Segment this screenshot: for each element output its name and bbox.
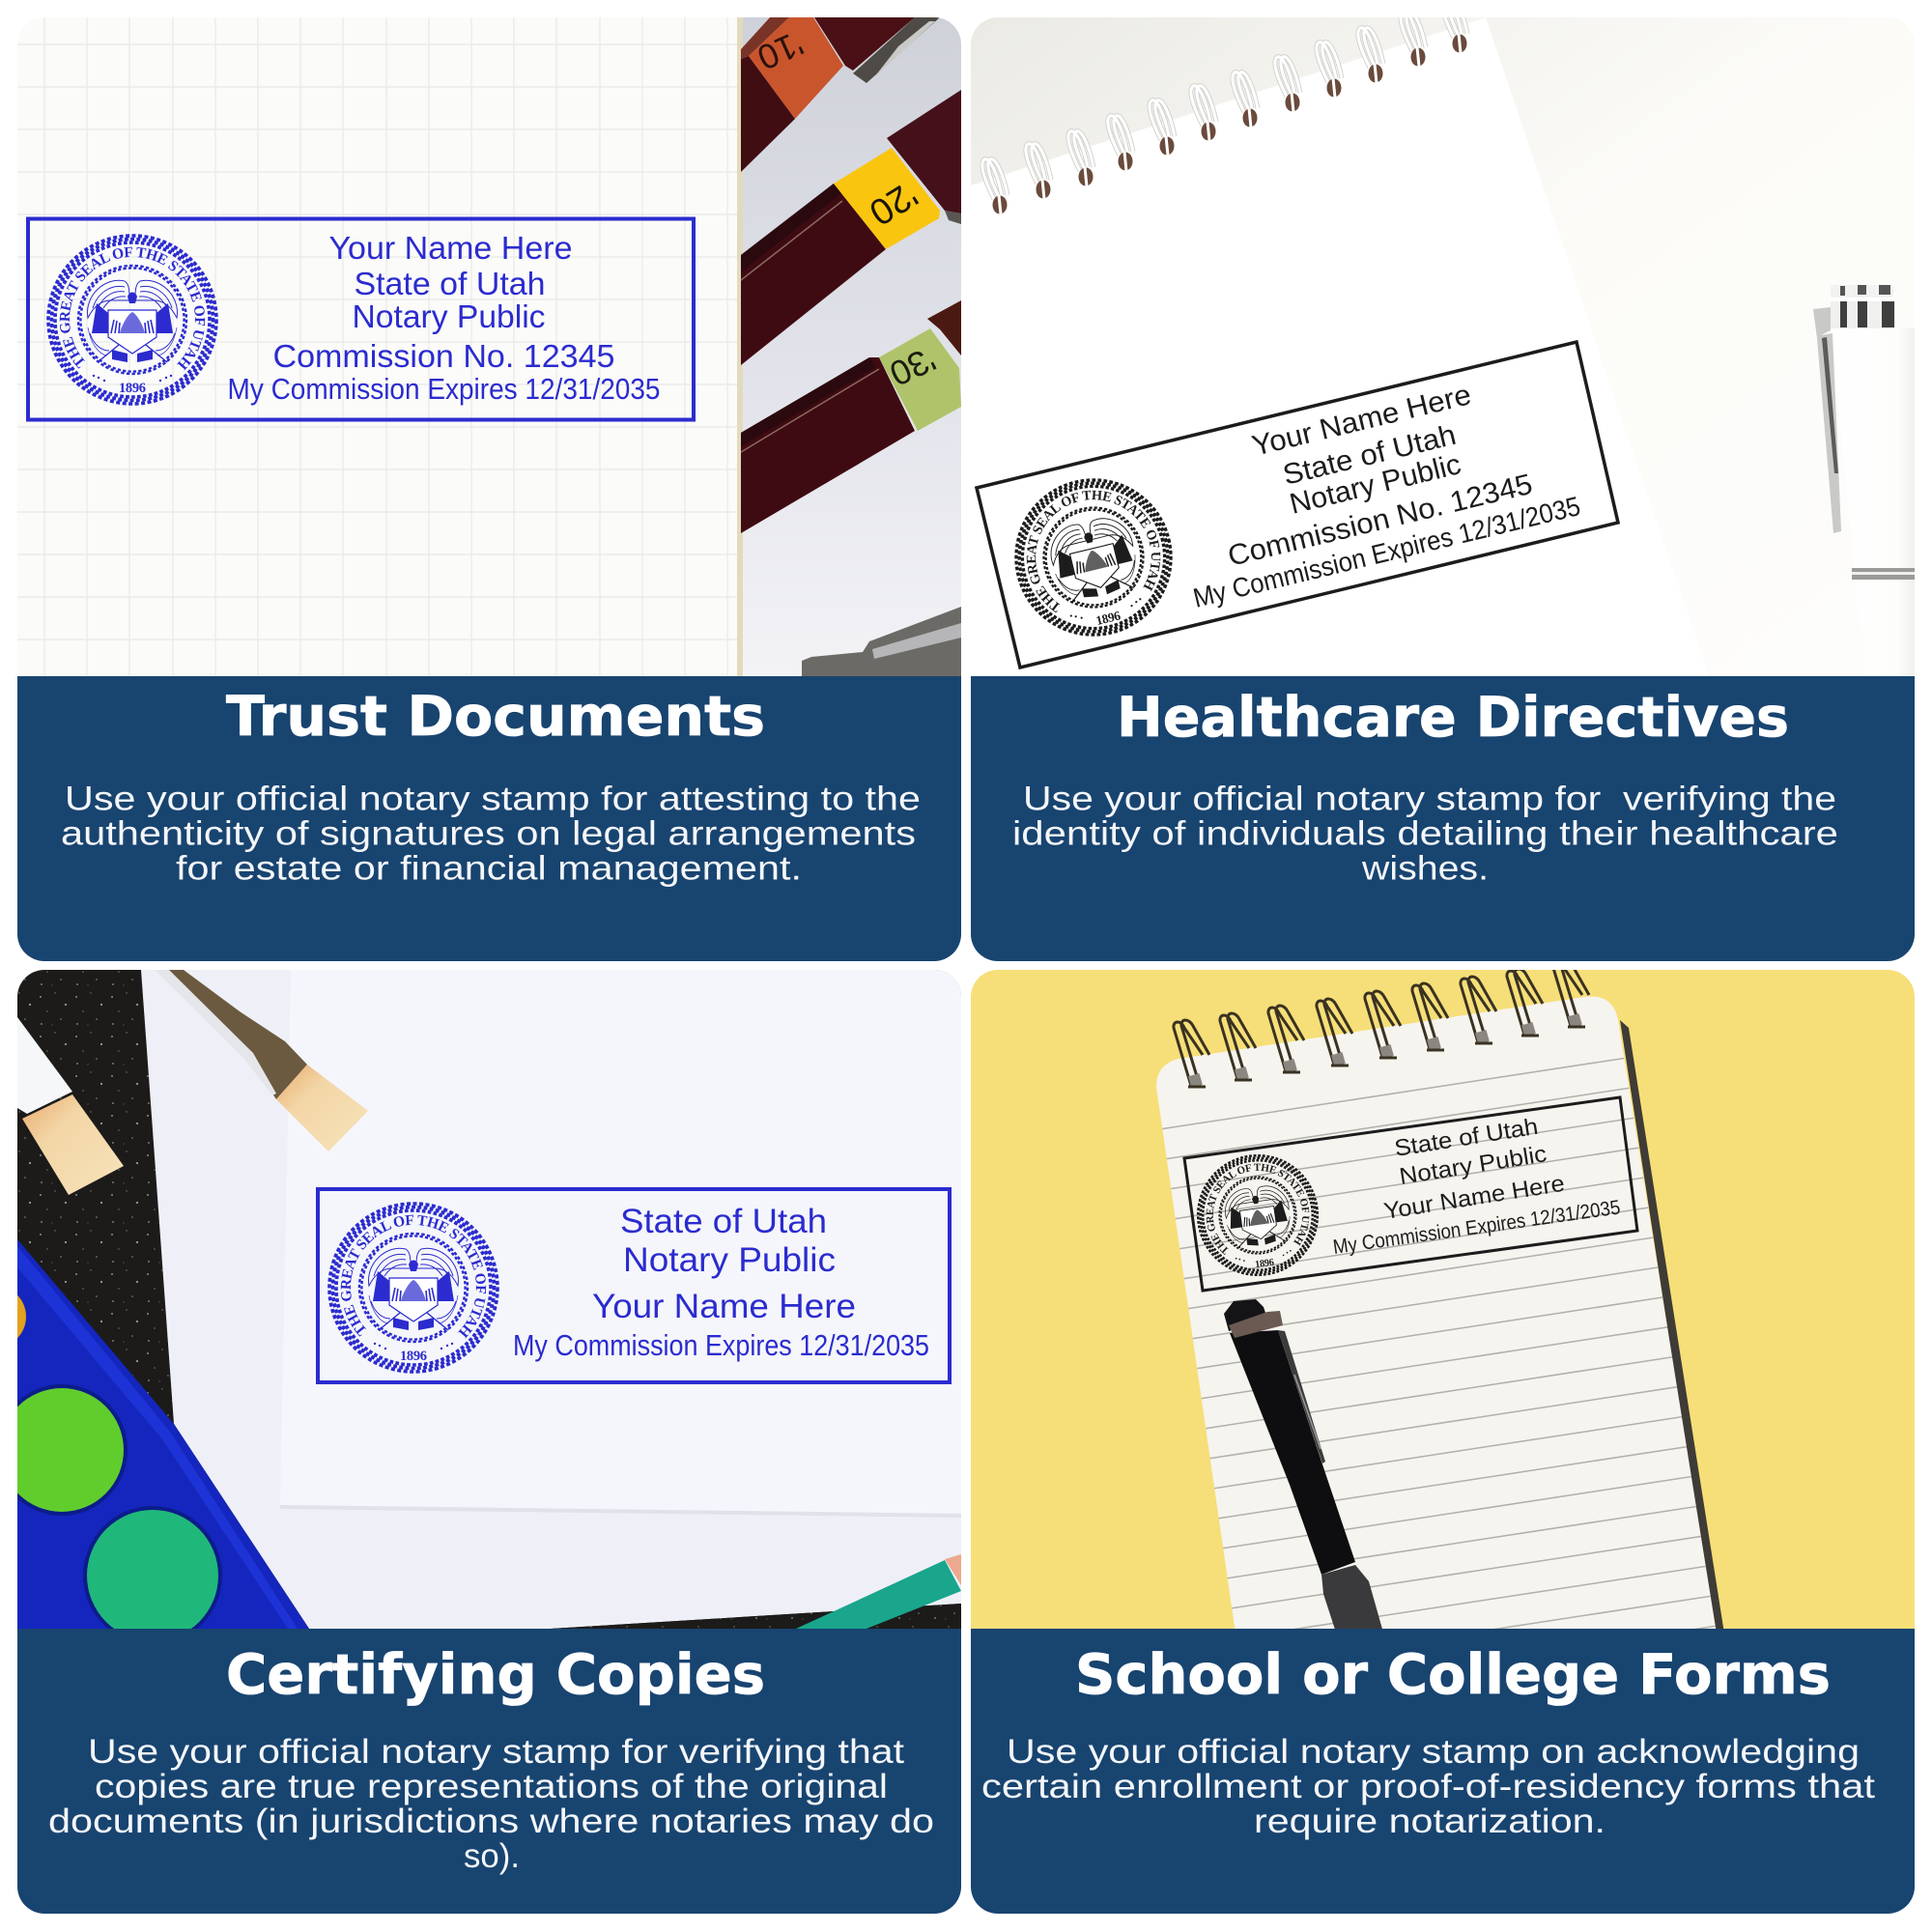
brush right [155, 970, 368, 1151]
seal [46, 234, 218, 406]
heading: School or College Forms [1075, 1643, 1831, 1707]
body text: identity of individuals detailing their healthcare [1012, 815, 1838, 852]
photo: grid paper and pens [17, 17, 961, 676]
seal: THE GREAT SEAL OF THE STATE OF UTAH [60, 247, 205, 371]
body text: Use your official notary stamp on acknowledging [1007, 1733, 1860, 1771]
stamp text [228, 230, 661, 406]
stamp: black notary impression [1182, 1095, 1639, 1293]
pen: 20: '20 [862, 173, 924, 233]
seal [1196, 1154, 1320, 1276]
pen clip [802, 607, 961, 676]
caption panel [971, 1629, 1915, 1914]
stamp: blue notary impression [316, 1187, 952, 1384]
stamp text: My Commission Expires 12/31/2035 [1331, 1196, 1622, 1259]
paint palette [0, 1239, 309, 1645]
seal: THE GREAT SEAL OF THE STATE OF UTAH [1206, 1163, 1310, 1256]
caption panel [17, 676, 961, 961]
stamp: black notary impression [974, 340, 1621, 670]
stamp text: Notary Public [1287, 448, 1464, 521]
seal: 1896 [1094, 608, 1122, 628]
stamp text [1190, 379, 1583, 613]
notepad [1156, 970, 1723, 1629]
black pen [1224, 1299, 1383, 1633]
notebook [971, 17, 1549, 612]
pen: 10: '10 [752, 23, 810, 78]
panel: Certifying Copies [17, 970, 961, 1914]
body text: require notarization. [1254, 1803, 1605, 1840]
photo: spiral notebook and white pen [971, 0, 1915, 676]
body text: authenticity of signatures on legal arrangements [61, 815, 916, 852]
stamp text: Notary Public [1398, 1141, 1548, 1190]
stamp text: State of Utah [1393, 1114, 1540, 1162]
body text: so). [464, 1837, 520, 1875]
caption panel [971, 676, 1915, 961]
stamp text: My Commission Expires 12/31/2035 [513, 1328, 929, 1362]
photo: yellow background and ruled notepad [971, 970, 1915, 1629]
heading: Healthcare Directives [1117, 686, 1789, 750]
heading: Certifying Copies [226, 1643, 765, 1707]
body text: Use your official notary stamp for verifying that [88, 1733, 904, 1771]
stamp text: Your Name Here [592, 1288, 856, 1325]
pen: 30: '30 [884, 339, 942, 394]
body text [1014, 785, 1837, 880]
stamp text: My Commission Expires 12/31/2035 [228, 372, 661, 406]
seal: 1896 [119, 381, 146, 396]
stamp text: Your Name Here [1249, 379, 1474, 463]
photo: paper, brushes and paint palette [0, 970, 961, 1645]
pencil [551, 1554, 961, 1629]
stamp text [1331, 1114, 1622, 1259]
stamp text: Notary Public [623, 1241, 836, 1279]
panel: Trust Documents [17, 17, 961, 961]
body text: documents (in jurisdictions where notaries may do [48, 1803, 934, 1840]
stamp text: State of Utah [354, 266, 545, 301]
body text [61, 781, 921, 887]
heading: Trust Documents [226, 685, 765, 749]
stamp text: Notary Public [352, 298, 545, 334]
body text: certain enrollment or proof-of-residency forms that [981, 1768, 1875, 1805]
pen: 30 [741, 300, 961, 533]
body text: for estate or financial management. [176, 850, 802, 887]
body text: Use your official notary stamp for attesting to the [65, 781, 921, 817]
body text: Use your official notary stamp for verifying the [1023, 781, 1836, 817]
body text: wishes. [1361, 850, 1489, 887]
pen top ring [1831, 285, 1895, 328]
body text [48, 1733, 934, 1875]
stamp text: My Commission Expires 12/31/2035 [1190, 491, 1583, 613]
caption panel [17, 1629, 961, 1914]
stamp text: State of Utah [1280, 419, 1460, 492]
spiral rings [1174, 960, 1589, 1088]
brush left [17, 1017, 124, 1195]
stamp text: State of Utah [620, 1203, 827, 1240]
white pen [1813, 285, 1915, 676]
panel: Healthcare Directives [971, 17, 1915, 961]
panel: School or College Forms [971, 970, 1915, 1914]
seal: 1896 [1254, 1257, 1275, 1270]
seal [327, 1202, 499, 1374]
stamp: blue notary impression [26, 216, 696, 421]
stamp text [513, 1203, 929, 1362]
seal: THE GREAT SEAL OF THE STATE OF UTAH [340, 1215, 487, 1339]
stamp text: Your Name Here [328, 230, 572, 266]
seal: 1896 [400, 1349, 427, 1364]
body text: copies are true representations of the original [95, 1768, 888, 1805]
spiral binding [982, 0, 1467, 214]
stamp text: Commission No. 12345 [272, 338, 614, 374]
stamp text: Commission No. 12345 [1225, 469, 1536, 573]
pen clip [1813, 307, 1841, 533]
pen: 20 [741, 90, 961, 365]
seal: THE GREAT SEAL OF THE STATE OF UTAH [1026, 491, 1161, 612]
body text [981, 1733, 1875, 1840]
stamp text: Your Name Here [1382, 1171, 1567, 1225]
pen: 10 [741, 17, 940, 172]
